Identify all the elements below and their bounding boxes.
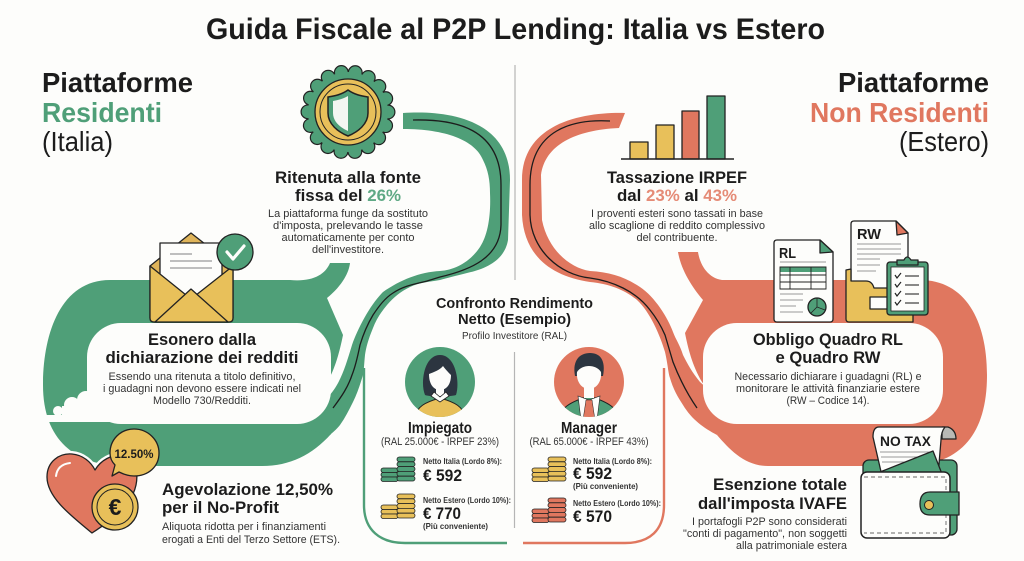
text: esenzione: alla patrimoniale estera	[736, 540, 847, 552]
icon: bar chart	[621, 96, 734, 159]
white box: obbligo	[703, 323, 943, 424]
text: impiegato netto italia: Netto Italia (Lordo 8%):	[423, 456, 502, 466]
icon: heart with coin and bubble	[47, 429, 159, 533]
heading: non residenti: Piattaforme	[838, 67, 989, 98]
icon: gold coins manager	[532, 457, 566, 482]
text: manager netto italia	[573, 456, 652, 491]
icon: wallet with no tax paper	[861, 427, 959, 538]
icon: RW document, folder, clipboard: RW	[857, 226, 882, 243]
heading: non residenti: Non Residenti	[810, 97, 989, 128]
text: ritenuta	[268, 168, 428, 256]
text: comparison heading	[436, 296, 593, 342]
text: tassazione	[589, 168, 765, 244]
title: Guida Fiscale al P2P Lending: Italia vs Estero	[206, 13, 825, 46]
icon: red coins	[532, 498, 566, 522]
red ring flow	[678, 252, 987, 466]
heading: non residenti: (Estero)	[899, 126, 989, 157]
text: comparison heading: Confronto Rendimento	[436, 296, 593, 312]
text: impiegato	[381, 420, 499, 448]
text: manager: (RAL 65.000€ - IRPEF 43%)	[530, 436, 648, 448]
text: impiegato: Impiegato	[408, 420, 472, 437]
text: impiegato: (RAL 25.000€ - IRPEF 23%)	[381, 436, 499, 448]
icon: heart with coin and bubble: €	[109, 494, 122, 520]
heading: non residenti	[810, 67, 989, 157]
icon: envelope with check	[150, 233, 253, 322]
text: manager netto estero: Netto Estero (Lordo 10%):	[573, 498, 661, 508]
green connector band	[310, 112, 510, 435]
text: tassazione: I proventi esteri sono tassati in base	[591, 208, 763, 220]
red connector band	[522, 113, 735, 435]
icon: shield medal	[308, 72, 388, 152]
text: ritenuta: dell'investitore.	[312, 244, 384, 256]
green ring flow	[43, 263, 350, 466]
text: obbligo	[734, 330, 922, 407]
text: esonero: i guadagni non devono essere indicati nel	[103, 383, 301, 395]
heading: residenti: Piattaforme	[42, 67, 193, 98]
icon: wallet with no tax paper: NO TAX	[880, 433, 932, 449]
text: manager	[530, 420, 648, 448]
text: obbligo: Obbligo Quadro RL	[753, 330, 903, 349]
text: ritenuta: d'imposta, prelevando le tasse	[273, 220, 423, 232]
text: agevolazione: erogati a Enti del Terzo Settore (ETS).	[162, 534, 340, 546]
text: manager netto estero: € 570	[573, 507, 612, 526]
text: esonero: Modello 730/Redditi.	[153, 395, 251, 407]
text: impiegato netto estero: (Più conveniente)	[423, 521, 488, 531]
text: esonero: Essendo una ritenuta a titolo definitivo,	[108, 371, 296, 383]
text: ritenuta: automaticamente per conto	[282, 232, 415, 244]
text: manager netto estero	[573, 498, 661, 526]
icon: green coins	[381, 457, 415, 482]
text: impiegato netto estero	[423, 495, 511, 531]
text: obbligo: (RW – Codice 14).	[786, 395, 870, 407]
central comparison panel	[364, 352, 664, 543]
text: esonero	[103, 330, 301, 407]
text: esonero: Esonero dalla	[148, 330, 257, 349]
text: comparison heading: Profilo Investitore (RAL)	[462, 330, 567, 342]
text: manager netto italia: Netto Italia (Lordo 8%):	[573, 456, 652, 466]
heading: residenti: Residenti	[42, 97, 162, 128]
icon: RW document, folder, clipboard	[846, 221, 928, 322]
icon: heart with coin and bubble: 12.50%	[114, 449, 154, 461]
text: tassazione: Tassazione IRPEF	[607, 168, 747, 187]
text: esenzione: "conti di pagamento", non soggetti	[683, 528, 847, 540]
text: esenzione	[683, 475, 847, 552]
text: ritenuta: fissa del 26%	[295, 186, 401, 205]
text: tassazione: dal 23% al 43%	[617, 186, 737, 205]
text: impiegato netto estero: Netto Estero (Lordo 10%):	[423, 495, 511, 505]
text: ritenuta: La piattaforma funge da sostituto	[268, 208, 428, 220]
text: manager netto italia: (Più conveniente)	[573, 481, 638, 491]
icon: RL document: RL	[779, 245, 796, 262]
text: esenzione: dall'imposta IVAFE	[698, 494, 847, 513]
text: obbligo: Necessario dichiarare i guadagni (RL) e	[734, 371, 922, 383]
text: impiegato netto italia: € 592	[423, 466, 462, 485]
text: obbligo: monitorare le attività finanziarie estere	[736, 383, 920, 395]
text: agevolazione: Aliquota ridotta per i finanziamenti	[162, 521, 326, 533]
text: esonero: dichiarazione dei redditi	[106, 348, 298, 367]
text: agevolazione: Agevolazione 12,50%	[162, 480, 333, 499]
text: impiegato netto italia	[423, 456, 502, 485]
text: agevolazione	[162, 480, 340, 546]
avatar: manager	[554, 347, 624, 420]
text: impiegato netto estero: € 770	[423, 504, 461, 523]
text: tassazione: allo scaglione di reddito complessivo	[589, 220, 765, 232]
text: tassazione: del contribuente.	[636, 232, 718, 244]
text: obbligo: e Quadro RW	[776, 348, 881, 367]
heading: residenti: (Italia)	[42, 126, 113, 157]
vertical divider	[514, 65, 516, 280]
text: ritenuta: Ritenuta alla fonte	[275, 168, 421, 187]
icon: gold coins	[381, 494, 415, 518]
text: esenzione: I portafogli P2P sono considerati	[692, 516, 847, 528]
text: manager netto italia: € 592	[573, 464, 612, 483]
heading: residenti	[42, 67, 193, 157]
text: manager: Manager	[561, 420, 617, 437]
text: comparison heading: Netto (Esempio)	[458, 312, 571, 328]
icon: RL document	[774, 240, 833, 322]
white box: esonero	[40, 323, 331, 424]
text: esenzione: Esenzione totale	[713, 475, 847, 494]
avatar: impiegato	[405, 347, 475, 420]
text: agevolazione: per il No-Profit	[162, 498, 279, 517]
